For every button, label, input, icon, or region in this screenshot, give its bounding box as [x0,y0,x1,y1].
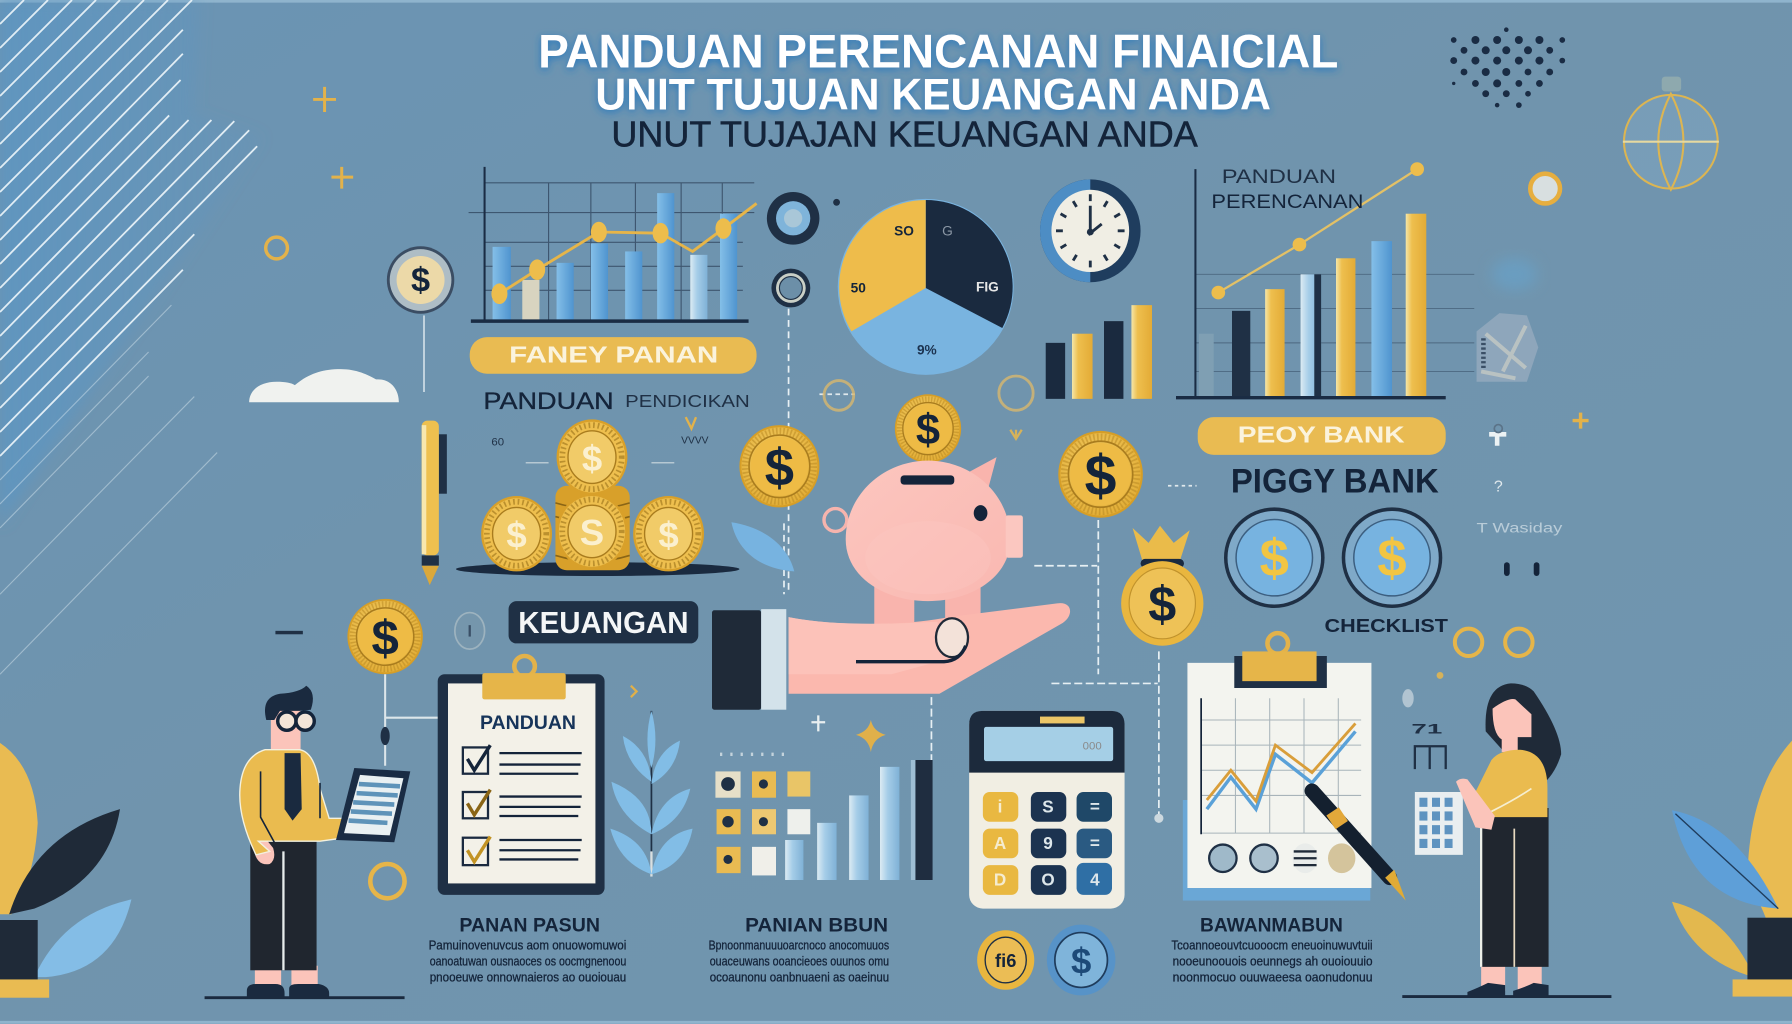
icon: coin stack: $ [658,514,679,555]
heading: panduan: 60 [491,437,504,449]
chart: rising bars: PANDUAN [1222,166,1336,188]
panel: line chart paper [1183,633,1371,901]
icon: coin stack [456,419,739,576]
man with tablet [205,686,405,998]
small symbols by woman: 71 [1411,722,1443,737]
icon: calculator [969,711,1125,909]
icon: piggy bank [824,457,1023,632]
small faded notes right: T Wasiday [1477,521,1562,536]
text block two: PANIAN BBUN [745,914,888,936]
small faded notes right [1477,425,1562,576]
icon: gold coin left of piggy [739,425,819,507]
plant right [1672,741,1792,997]
icon: calculator: S [1042,797,1054,817]
small faded notes right: ? [1494,478,1503,495]
icon: cloud [249,369,399,402]
plant left [0,743,131,998]
title [538,25,1338,154]
label pill: faney panan [470,337,757,374]
title: UNUT TUJAJAN KEUANGAN ANDA [611,113,1198,154]
pie chart: 50 [851,281,866,296]
icon: tablet [336,768,410,842]
heading: panduan: PENDICIKAN [625,391,750,411]
decorative rings and plus marks right [1455,174,1589,656]
text block one: Pamuinovenuvcus aom onuowomuwoi [429,939,626,953]
pie chart: FIG [976,279,999,294]
icon: gold coin right of piggy [1058,431,1143,518]
icon: pale dollar coin [387,246,454,392]
icon: coin stack: S [580,512,604,553]
text block three [1171,914,1373,985]
panel: checklist clipboard: PANDUAN [480,712,576,734]
decorative plus marks and ring left [266,87,353,259]
icon: blue coin one: $ [1260,529,1289,588]
icon: pale dollar coin: $ [411,261,430,299]
heading: panduan [483,388,750,449]
connector rings centre [526,376,1197,823]
icon grid and bars [715,760,933,880]
icon: small coins below calculator [977,925,1115,995]
icon: gold coin above piggy: $ [916,407,940,455]
icon: crumpled map [1477,313,1538,382]
text block three: Tcoannoeouvtcuooocm eneuoinuwuvtuii [1171,939,1373,953]
icon: hand holding piggy [712,603,1070,710]
icon: plant [610,711,693,877]
title: UNIT TUJUAN KEUANGAN ANDA [595,71,1271,120]
icon: small coins below calculator: fi6 [995,950,1016,971]
title: PANDUAN PERENCANAN FINAICIAL [538,25,1338,77]
icon: calculator: = [1090,833,1100,853]
icon: coin stack: $ [582,438,602,479]
checklist item 3 [463,837,582,865]
icon: calculator: D [994,870,1006,890]
icon: coin stack: $ [506,514,527,555]
bar chart small [1046,305,1152,399]
icon: blue coin one [1224,507,1325,608]
label: checklist: CHECKLIST [1325,615,1448,636]
icon: calculator: 9 [1043,833,1053,853]
pie chart: G [942,223,953,238]
text block one: PANAN PASUN [459,914,600,936]
icon: calculator: O [1041,870,1055,890]
text block three: noonmocuo ouuwaeesa oaonudonuu [1173,971,1373,985]
icon: money bag: $ [1148,576,1176,633]
panel: checklist clipboard [438,656,605,895]
icon: gold coin right of piggy: $ [1085,444,1116,508]
icon: money bag [1121,526,1203,646]
text block three: BAWANMABUN [1200,914,1343,936]
heading: piggy bank: PIGGY BANK [1231,463,1439,501]
dot pattern [1450,27,1565,108]
chart: rising bars [1176,162,1474,398]
chart: bars with trend line [469,167,757,321]
icon: small coins below calculator: $ [1071,941,1091,982]
icon: globe [1623,77,1719,190]
icon: blue coin two: $ [1377,529,1407,588]
text block two: ocoaunonu oanbnuaeni as oaeinuu [710,971,889,985]
icon: calculator: 000 [1083,741,1102,753]
label pill: piggy bank: PEOY BANK [1238,421,1405,447]
icon: fountain pen [1312,791,1406,901]
icon: leaf [731,522,794,571]
pie chart: SO [894,223,914,238]
heading: panduan: PANDUAN [483,388,614,415]
background stripes [0,0,263,674]
text block three: nooeunoouois oeunnegs ah ouoiouuio [1173,955,1373,969]
small yellow star mark [631,686,886,754]
text block two: Bpnoonmanuuuoarcnoco anocomuuos [709,939,889,953]
pie chart: 9% [917,342,937,357]
icon: calculator: A [994,833,1006,853]
icon: calculator: 4 [1090,870,1100,890]
woman [1402,683,1611,997]
icon: clock [1040,179,1141,282]
icon: pen [422,421,447,585]
chart: rising bars: PERENCANAN [1211,191,1363,213]
icon: small table [1415,792,1463,855]
text block two: ouaceuwans ooancieoes ouunos omu [710,955,889,969]
text block two [709,914,889,985]
text block one [429,914,626,985]
icon: gold coin above piggy [895,394,961,463]
icon: calculator: = [1090,797,1100,817]
icon: gold coin near man [275,599,485,766]
pie chart [838,199,1014,375]
checklist item 2 [463,790,582,818]
text block one: pnooeuwe onnownaieros ao ouoiouau [430,971,626,985]
label pill: keuangan: KEUANGAN [518,605,689,640]
icon: calculator: i [998,797,1002,817]
heading: panduan: VVVV [681,435,709,446]
label pill: faney panan: FANEY PANAN [509,341,718,367]
text block one: oanoatuwan ousnaoces os oocmgnenoou [430,955,626,969]
checklist item 1 [463,745,582,774]
small symbols by woman [1402,672,1446,769]
icon: gold coin near man: $ [371,612,399,666]
label pill: piggy bank [1198,417,1446,455]
icon: dark rings and connectors [767,192,840,594]
icon: gold coin left of piggy: $ [765,439,794,498]
icon: blue coin two [1342,507,1442,608]
